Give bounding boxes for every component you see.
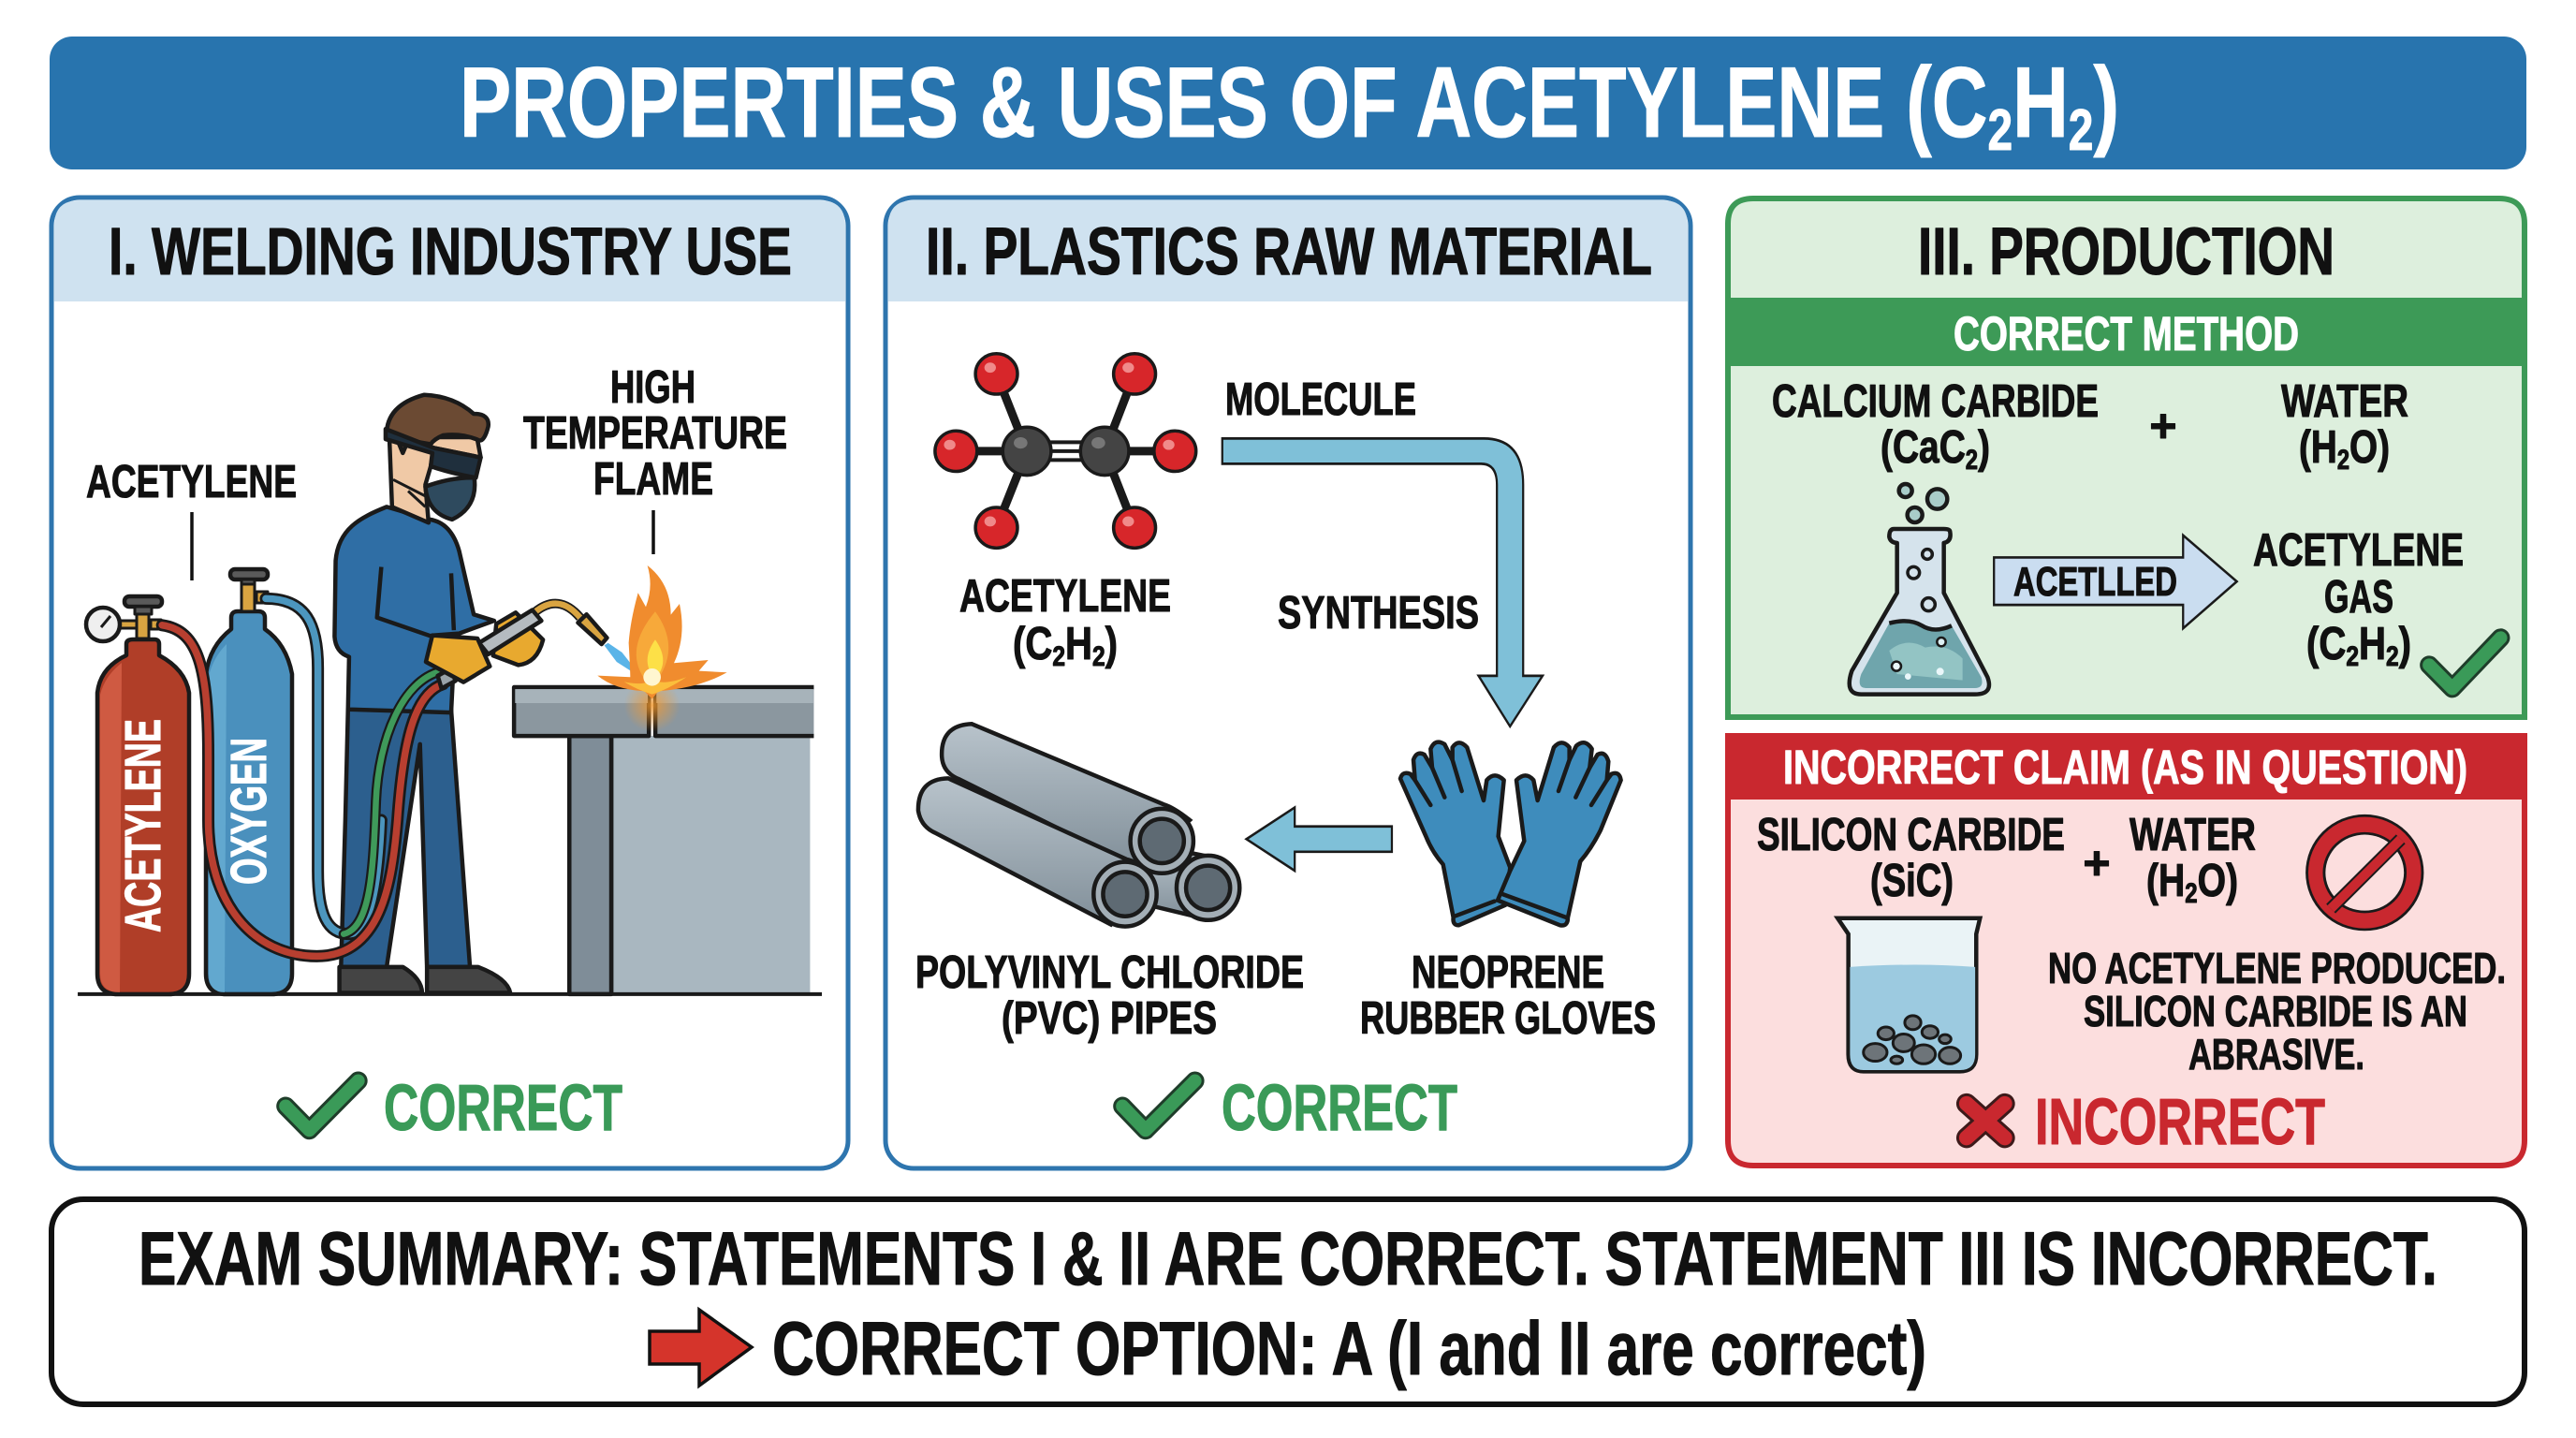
title banner: 2 (1987, 98, 2012, 163)
label: calcium carbide (1772, 376, 2099, 476)
arrow label: acetlled: ACETLLED (2013, 559, 2177, 605)
label: acetylene gas: ACETYLENE (2253, 525, 2464, 576)
title banner: H (2012, 46, 2069, 158)
panel: II. plastics raw material (886, 198, 1690, 1168)
title banner: 2 (2069, 98, 2093, 163)
icon: oxygen cylinder (206, 569, 292, 994)
label: molecule: MOLECULE (1225, 374, 1416, 425)
label: pvc pipes: POLYVINYL CHLORIDE (915, 947, 1304, 998)
label: water: (H (2146, 856, 2195, 906)
icon: check mark (285, 1081, 359, 1130)
icon: red cross (1967, 1104, 2005, 1137)
label: water (2130, 810, 2256, 909)
label: acetylene gas (2253, 525, 2464, 672)
label: synthesis: SYNTHESIS (1278, 588, 1479, 638)
label: pvc pipes: (PVC) PIPES (1002, 993, 1217, 1044)
label: acetylene gas: H (2359, 619, 2386, 669)
label: acetylene: ACETYLENE (86, 457, 297, 507)
label: water: 2 (2185, 878, 2198, 909)
icon: gas hoses (162, 598, 443, 956)
label: acetylene formula: ACETYLENE (959, 571, 1171, 622)
panel: I. welding industry use (51, 198, 848, 1168)
panel: III. production, incorrect claim (1725, 733, 2527, 1166)
plus sign: + (2083, 837, 2111, 889)
icon: check mark (1122, 1081, 1195, 1130)
arrow: gloves to pipes (1247, 807, 1392, 871)
label: water: (H (2299, 422, 2348, 473)
cylinder label: acetylene: ACETYLENE (115, 719, 171, 932)
icon: pvc pipes (918, 724, 1239, 927)
label: acetylene formula (959, 571, 1171, 672)
label: water: O) (2198, 856, 2238, 906)
icon: acetylene cylinder (86, 596, 189, 994)
label: acetylene formula: 2 (1052, 641, 1065, 672)
icon: flame (597, 565, 727, 732)
heading: plastics: II. PLASTICS RAW MATERIAL (926, 215, 1652, 289)
label: acetylene gas: GAS (2324, 572, 2393, 623)
label: water: WATER (2130, 810, 2256, 860)
label: pvc pipes (915, 947, 1304, 1044)
plus sign: + (2149, 400, 2177, 452)
label: silicon carbide (1757, 810, 2065, 906)
illustration: acetylene molecule (935, 354, 1196, 548)
label: calcium carbide: ) (1978, 422, 1990, 473)
icon: prohibition sign (2305, 814, 2423, 931)
label: silicon carbide: (SiC) (1870, 856, 1954, 906)
arrow: synthesis (1222, 438, 1543, 726)
text: correct option: CORRECT OPTION: A (I and II are correct) (772, 1307, 1926, 1391)
icon: neoprene gloves (1400, 742, 1621, 926)
icon: welder figure (334, 395, 510, 993)
title banner: ) (2093, 46, 2119, 158)
label: acetylene gas: ) (2399, 619, 2411, 669)
heading: welding: I. WELDING INDUSTRY USE (109, 215, 792, 289)
panel: exam summary (51, 1199, 2525, 1404)
label: water: 2 (2337, 445, 2349, 476)
label: water: WATER (2281, 376, 2408, 427)
label: high temperature flame: TEMPERATURE (523, 408, 787, 459)
label: acetylene gas: 2 (2346, 641, 2359, 672)
arrow: red pointer (650, 1310, 752, 1386)
sub-heading: correct method: CORRECT METHOD (1954, 307, 2299, 360)
label: acetylene formula: ) (1105, 619, 1118, 669)
label: acetylene formula: 2 (1092, 641, 1105, 672)
icon: workbench (514, 687, 813, 994)
label: acetylene formula: (C (1013, 619, 1061, 669)
label: water (2281, 376, 2408, 476)
heading: production: III. PRODUCTION (1918, 215, 2334, 289)
icon: check mark (2429, 638, 2500, 688)
panel: III. production, correct method (1728, 198, 2525, 717)
label: water: O) (2349, 422, 2390, 473)
icon: beaker with silicon carbide (1837, 918, 1980, 1071)
label: high temperature flame (523, 362, 787, 505)
icon: reaction flask (1850, 484, 1989, 695)
label: high temperature flame: HIGH (610, 362, 695, 413)
icon: torch and gloves (426, 604, 642, 688)
text: explanation (2048, 944, 2506, 1078)
label: acetylene gas: (C (2306, 619, 2355, 669)
verdict: correct: CORRECT (1222, 1071, 1457, 1144)
verdict: correct: CORRECT (384, 1071, 622, 1144)
title banner: PROPERTIES & USES OF ACETYLENE (C (460, 46, 2437, 158)
illustration: welder, hoses and bench (78, 395, 822, 994)
title banner (50, 37, 2526, 169)
label: calcium carbide: (CaC (1881, 422, 1987, 473)
label: silicon carbide: SILICON CARBIDE (1757, 810, 2065, 860)
label: neoprene gloves (1360, 947, 1656, 1044)
arrow: acetlled (1994, 536, 2237, 628)
cylinder label: oxygen: OXYGEN (221, 738, 277, 885)
label: neoprene gloves: NEOPRENE (1412, 947, 1604, 998)
label: high temperature flame: FLAME (593, 454, 713, 505)
label: neoprene gloves: RUBBER GLOVES (1360, 993, 1656, 1044)
text: explanation: ABRASIVE. (2188, 1030, 2364, 1078)
label: calcium carbide: 2 (1966, 445, 1978, 476)
verdict: incorrect: INCORRECT (2035, 1085, 2325, 1158)
label: acetylene gas: 2 (2386, 641, 2399, 672)
label: calcium carbide: CALCIUM CARBIDE (1772, 376, 2099, 427)
label: acetylene formula: H (1065, 619, 1092, 669)
